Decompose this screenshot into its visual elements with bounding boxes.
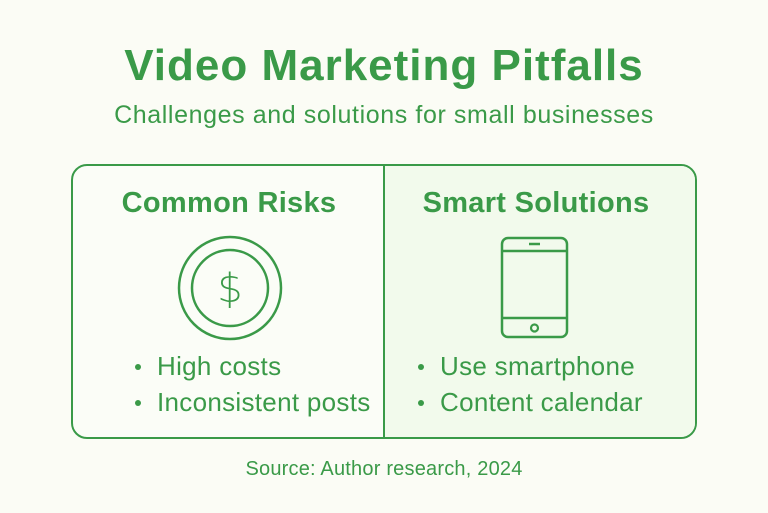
heading: common risks: Common Risks bbox=[122, 187, 336, 219]
bullets: risks: High costs bbox=[157, 351, 281, 381]
panel: solutions background bbox=[383, 166, 697, 437]
source note: Source: Author research, 2024 bbox=[245, 458, 523, 480]
bullets: risks bbox=[135, 351, 371, 417]
icon: dollar coin: $ bbox=[217, 266, 243, 312]
icon: smartphone bbox=[500, 236, 568, 338]
icon: dollar coin bbox=[178, 236, 282, 340]
panel: common risks bbox=[122, 187, 371, 417]
subtitle: Challenges and solutions for small businesses bbox=[114, 101, 654, 129]
title: Video Marketing Pitfalls bbox=[124, 41, 644, 90]
bullets: solutions: Use smartphone bbox=[440, 351, 635, 381]
heading: smart solutions: Smart Solutions bbox=[423, 187, 649, 219]
panel container bbox=[71, 164, 697, 439]
bullets: solutions: Content calendar bbox=[440, 387, 643, 417]
panel: smart solutions bbox=[418, 187, 649, 417]
bullets: risks: Inconsistent posts bbox=[157, 387, 371, 417]
bullets: solutions bbox=[418, 351, 643, 417]
